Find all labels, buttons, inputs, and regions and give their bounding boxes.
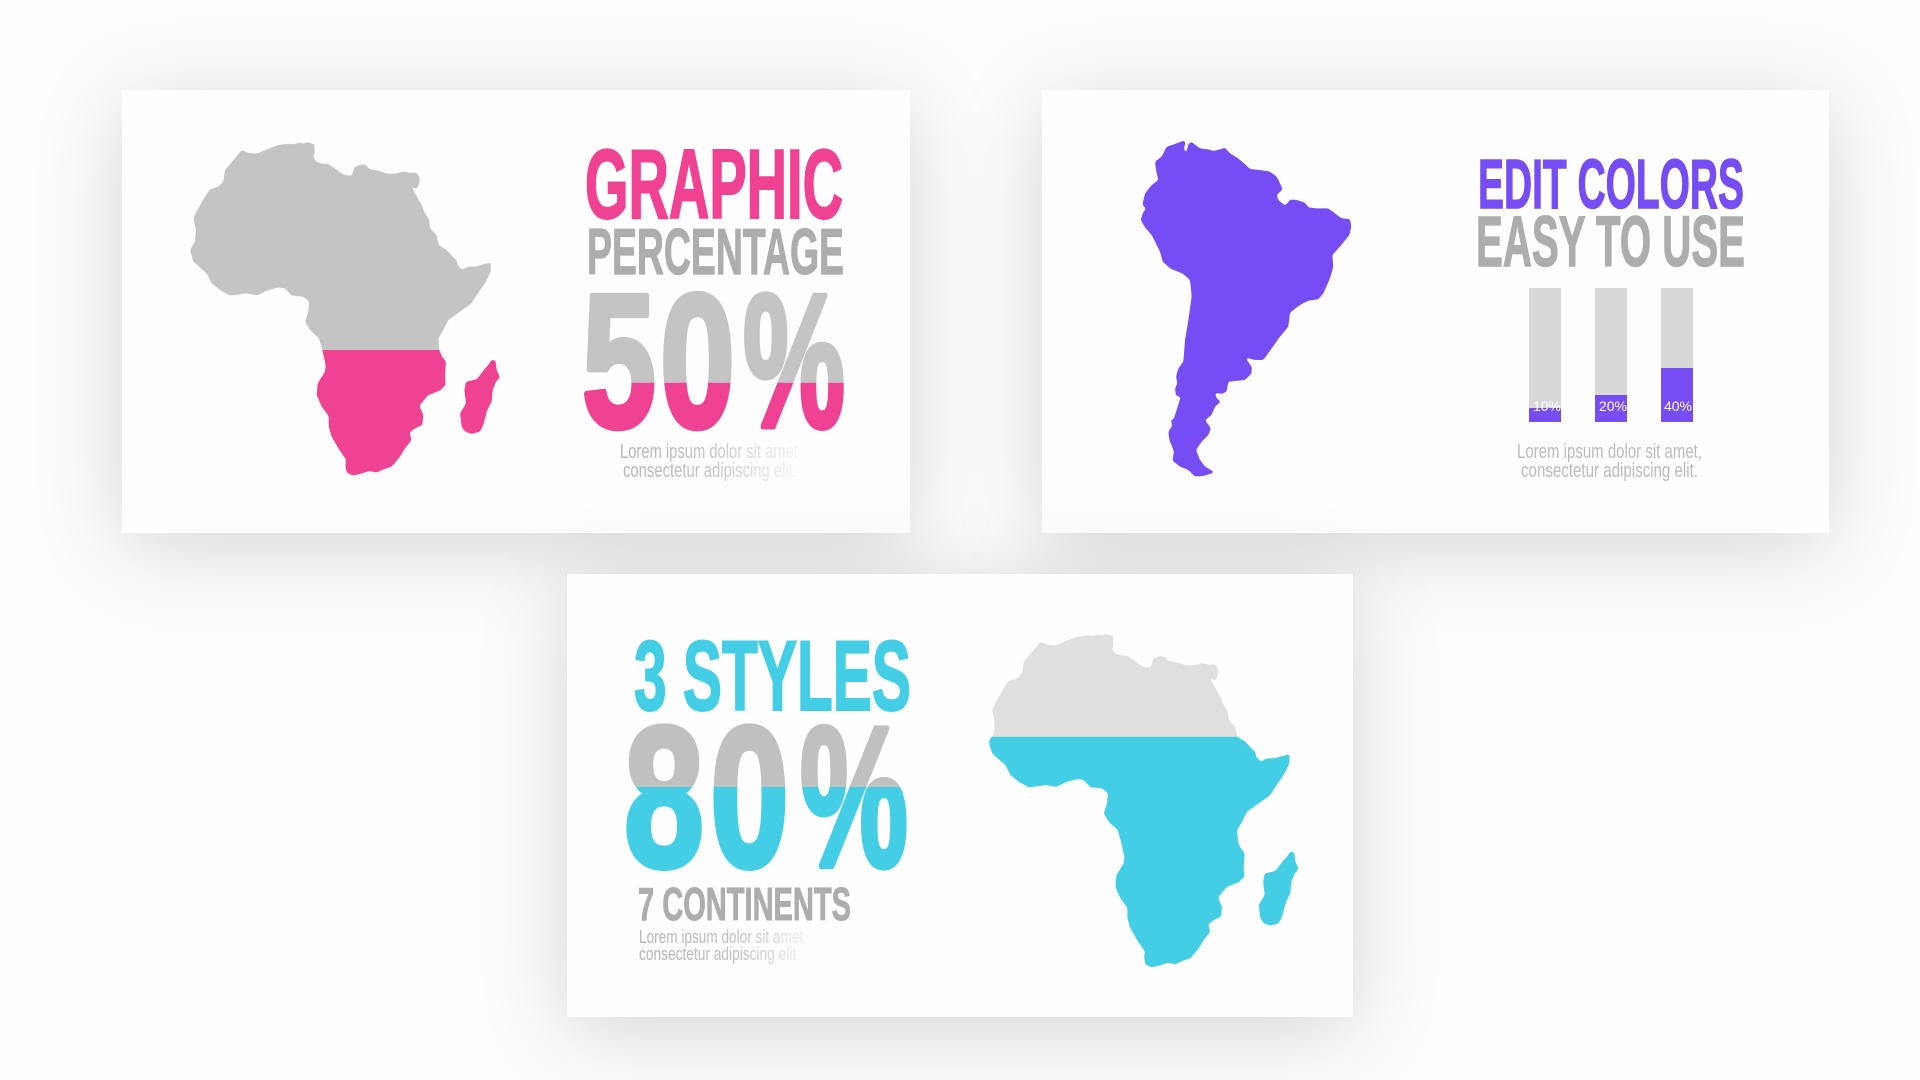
bar: 10 percent: 10%	[1533, 398, 1561, 414]
text block: lorem ipsum: Lorem ipsum dolor sit amet,	[1517, 441, 1702, 463]
subheading: 7 continents: 7 CONTINENTS	[638, 878, 851, 930]
bar chart	[1529, 288, 1693, 422]
big number: 80 percent	[626, 723, 907, 871]
panel: 3 styles	[567, 574, 1353, 1017]
bar: 40 percent	[1661, 288, 1693, 422]
big number: 50 percent: 5	[582, 256, 656, 468]
heading: 3 styles: 3 STYLES	[634, 620, 911, 731]
text block: lorem ipsum: consectetur adipiscing elit.	[623, 460, 797, 482]
big number: 50 percent: 0	[660, 256, 735, 468]
big number: 80 percent: 8	[624, 686, 704, 909]
text block: lorem ipsum	[1517, 441, 1702, 482]
text block: lorem ipsum: Lorem ipsum dolor sit amet,	[639, 927, 807, 947]
map: South America	[1141, 141, 1351, 477]
map: Africa filled 80 percent	[989, 634, 1299, 967]
big number: 80 percent: 8	[624, 686, 704, 909]
text block: lorem ipsum: consectetur adipiscing elit.	[639, 944, 800, 964]
big number: 80 percent: %	[800, 686, 908, 909]
big number: 80 percent: %	[800, 686, 908, 909]
text block: lorem ipsum: consectetur adipiscing elit.	[1521, 460, 1698, 482]
big number: 50 percent: %	[743, 256, 845, 468]
panel: edit colors	[1042, 90, 1829, 533]
map: Africa filled 50 percent	[190, 142, 500, 476]
big number: 50 percent: 5	[582, 256, 656, 468]
bar: 10 percent	[1529, 288, 1561, 422]
bar: 40 percent: 40%	[1664, 398, 1692, 414]
big number: 50 percent	[584, 290, 844, 432]
bar: 20 percent	[1595, 288, 1627, 422]
big number: 80 percent: 0	[710, 686, 789, 909]
panel: graphic percentage	[122, 90, 910, 533]
text block: lorem ipsum: Lorem ipsum dolor sit amet,	[620, 441, 802, 463]
text block: lorem ipsum	[620, 441, 802, 482]
big number: 50 percent: %	[743, 256, 845, 468]
bar: 20 percent: 20%	[1599, 398, 1627, 414]
big number: 80 percent: 0	[710, 686, 789, 909]
text block: lorem ipsum	[639, 927, 807, 964]
big number: 50 percent: 0	[660, 256, 735, 468]
